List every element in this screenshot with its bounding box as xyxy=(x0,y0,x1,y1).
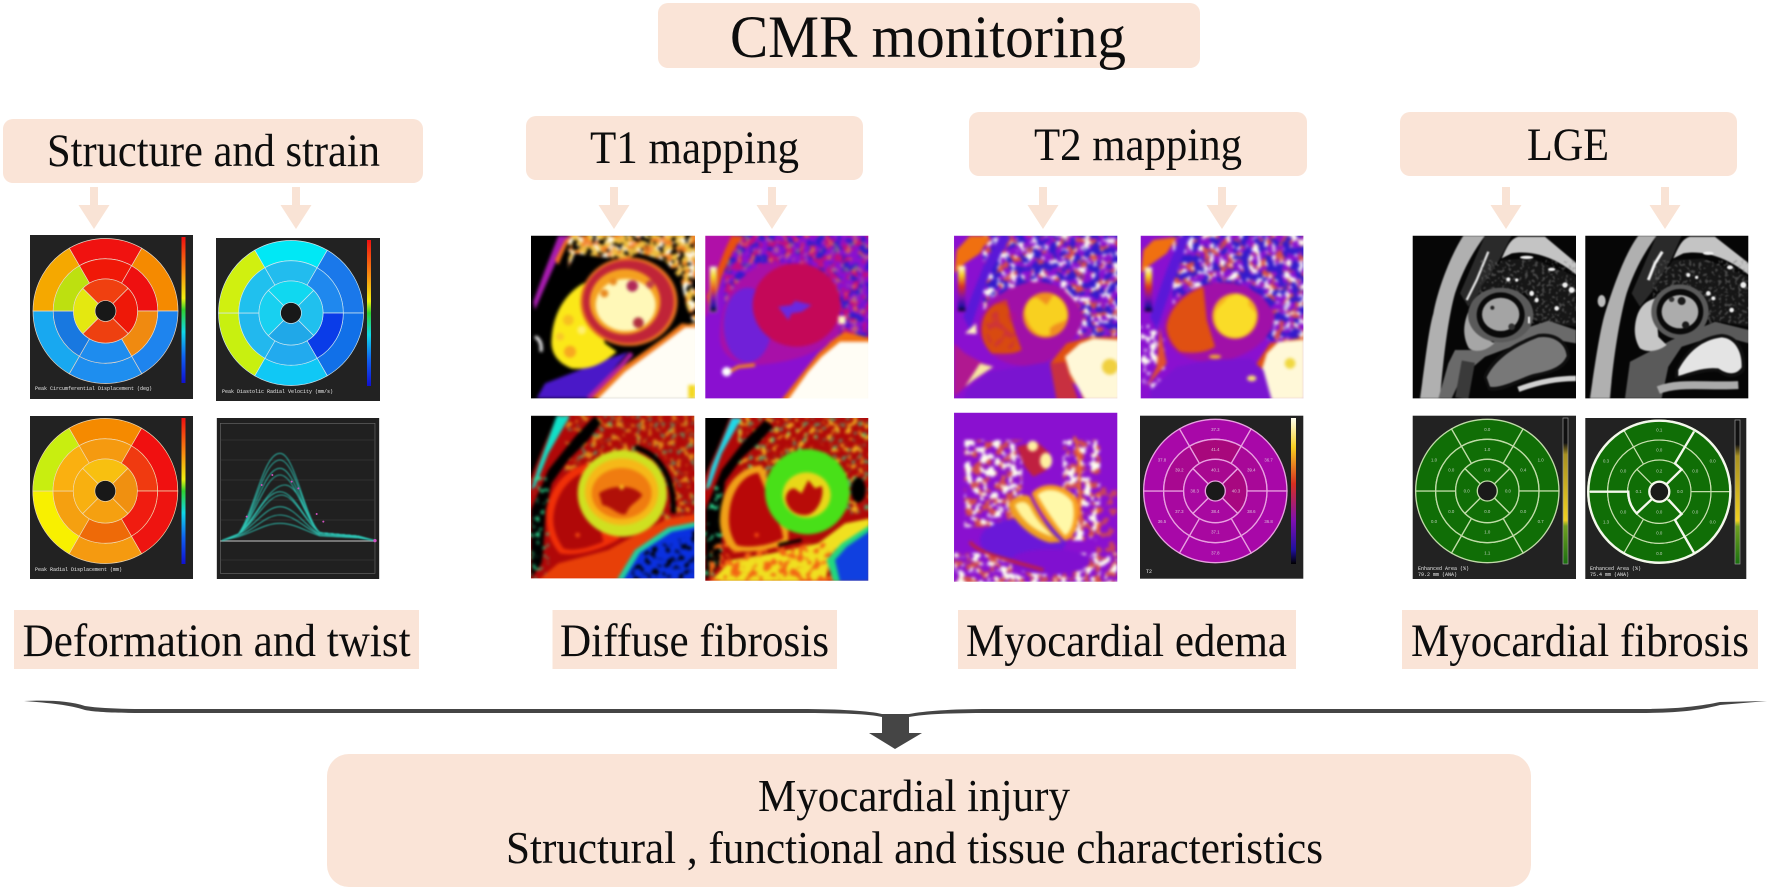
bullseye chart: LGE enhanced area: 0.4 xyxy=(1520,468,1527,473)
heading: T2 mapping xyxy=(969,112,1307,176)
image: LGE short-axis 2 xyxy=(1583,233,1753,403)
bullseye chart: LGE enhanced area with highlighted segments: 0.3 xyxy=(1603,458,1610,463)
bullseye chart: LGE enhanced area with highlighted segments: 0.0 xyxy=(1656,530,1663,535)
bullseye chart: LGE enhanced area: 0.0 xyxy=(1484,427,1491,432)
heading: T2 mapping: T2 mapping xyxy=(1034,119,1242,171)
bullseye chart: T2 values: 40.1 xyxy=(1211,468,1220,473)
image: T2 map 2 xyxy=(1138,233,1308,403)
label: Myocardial fibrosis: Myocardial fibrosis xyxy=(1411,615,1749,667)
conclusion box: Myocardial injury: Myocardial injury xyxy=(758,770,1070,821)
arrows from headings to images xyxy=(78,187,1680,229)
image: T1 colour map native xyxy=(528,413,698,583)
bullseye chart: LGE enhanced area with highlighted segments: 0.2 xyxy=(1656,468,1663,473)
bullseye chart: peak diastolic radial velocity xyxy=(216,238,380,401)
bullseye chart: LGE enhanced area: 79.2 mm (ANA) xyxy=(1418,572,1457,578)
bullseye chart: LGE enhanced area with highlighted segments: 0.0 xyxy=(1656,551,1663,556)
heading: Structure and strain: Structure and strain xyxy=(47,125,380,177)
image: T2 map 1 xyxy=(952,233,1122,403)
bullseye chart: LGE enhanced area: 0.0 xyxy=(1505,488,1512,493)
image: T1 colour map post-contrast xyxy=(702,413,872,583)
heading: T1 mapping: T1 mapping xyxy=(590,122,799,174)
bullseye chart: T2 values xyxy=(1140,416,1303,579)
bullseye chart: LGE enhanced area xyxy=(1413,416,1576,579)
bullseye chart: peak circumferential displacement xyxy=(30,235,193,399)
label: Diffuse fibrosis: Diffuse fibrosis xyxy=(560,615,829,667)
bullseye chart: LGE enhanced area with highlighted segments: 0.1 xyxy=(1656,428,1663,433)
bullseye chart: T2 values: 37.3 xyxy=(1175,509,1184,514)
bullseye chart: peak circumferential displacement: Peak Circumferential Displacement (deg) xyxy=(35,386,152,392)
bullseye chart: peak radial displacement xyxy=(30,416,193,579)
conclusion box: Myocardial injury: Structural , functional and tissue characteristics xyxy=(506,822,1323,873)
bullseye chart: T2 values: 37.3 xyxy=(1211,427,1220,432)
bullseye chart: LGE enhanced area with highlighted segments: 0.0 xyxy=(1656,448,1663,453)
image: LGE short-axis 1 xyxy=(1410,233,1580,403)
bullseye chart: LGE enhanced area: 0.0 xyxy=(1520,509,1527,514)
bullseye chart: LGE enhanced area with highlighted segments xyxy=(1585,418,1746,579)
label: Deformation and twist: Deformation and twist xyxy=(23,615,411,667)
bullseye chart: T2 values: 39.2 xyxy=(1175,468,1184,473)
label: Myocardial edema: Myocardial edema xyxy=(966,615,1287,667)
bullseye chart: LGE enhanced area with highlighted segments: Enhanced Area (%) xyxy=(1590,566,1641,572)
bullseye chart: LGE enhanced area with highlighted segments: 1.3 xyxy=(1603,520,1610,525)
bullseye chart: LGE enhanced area: 1.0 xyxy=(1484,530,1491,535)
image: T2 long-axis map xyxy=(952,410,1122,583)
bullseye chart: LGE enhanced area with highlighted segments: 0.0 xyxy=(1710,458,1716,463)
bullseye chart: T2 values: 41.4 xyxy=(1211,447,1220,452)
heading: LGE xyxy=(1400,112,1737,176)
bullseye chart: T2 values: 39.4 xyxy=(1247,468,1256,473)
image: T1 post-contrast map xyxy=(702,233,872,403)
bullseye chart: T2 values: 37.8 xyxy=(1158,458,1167,463)
heading: T1 mapping xyxy=(526,116,863,180)
bullseye chart: T2 values: 40.3 xyxy=(1232,488,1241,493)
bullseye chart: T2 values: 37.1 xyxy=(1211,530,1220,535)
bullseye chart: LGE enhanced area with highlighted segments: 0.0 xyxy=(1710,520,1716,525)
heading: LGE: LGE xyxy=(1527,119,1609,171)
bullseye chart: LGE enhanced area with highlighted segments: 0.0 xyxy=(1677,489,1684,494)
bullseye chart: LGE enhanced area: 0.0 xyxy=(1448,468,1455,473)
bullseye chart: T2 values: 38.3 xyxy=(1190,488,1199,493)
bullseye chart: LGE enhanced area: 1.1 xyxy=(1484,550,1491,555)
bullseye chart: LGE enhanced area with highlighted segments: 0.0 xyxy=(1620,510,1627,515)
bullseye chart: LGE enhanced area: 1.0 xyxy=(1431,458,1438,463)
bullseye chart: LGE enhanced area: 1.0 xyxy=(1538,458,1544,463)
bullseye chart: LGE enhanced area: 0.0 xyxy=(1484,509,1491,514)
image: T1 native map xyxy=(525,230,712,417)
bullseye chart: T2 values: 37.8 xyxy=(1211,550,1220,555)
bullseye chart: T2 values: 38.6 xyxy=(1247,509,1256,514)
bullseye chart: LGE enhanced area: 0.0 xyxy=(1431,519,1438,524)
bullseye chart: T2 values: 36.7 xyxy=(1264,458,1273,463)
bullseye chart: T2 values: T2 xyxy=(1146,569,1152,575)
bullseye chart: LGE enhanced area with highlighted segments: 0.0 xyxy=(1620,468,1627,473)
line chart: strain curves xyxy=(217,418,379,579)
bullseye chart: LGE enhanced area with highlighted segments: 75.4 mm (ANA) xyxy=(1590,572,1629,578)
title: CMR monitoring: CMR monitoring xyxy=(730,4,1126,70)
bullseye chart: LGE enhanced area with highlighted segments: 0.0 xyxy=(1692,510,1699,515)
bullseye chart: LGE enhanced area with highlighted segments: 0.0 xyxy=(1692,468,1699,473)
bullseye chart: LGE enhanced area: 1.0 xyxy=(1484,447,1491,452)
conclusion box: Myocardial injury xyxy=(327,754,1531,887)
bullseye chart: LGE enhanced area: 0.7 xyxy=(1538,519,1544,524)
bullseye chart: LGE enhanced area: 0.0 xyxy=(1448,509,1455,514)
bullseye chart: T2 values: 36.8 xyxy=(1264,519,1273,524)
bullseye chart: LGE enhanced area: 0.0 xyxy=(1464,488,1470,493)
bullseye chart: LGE enhanced area: 0.0 xyxy=(1484,468,1491,473)
bullseye chart: peak diastolic radial velocity: Peak Diastolic Radial Velocity (mm/s) xyxy=(222,389,333,395)
bullseye chart: T2 values: 38.4 xyxy=(1211,509,1220,514)
bullseye chart: LGE enhanced area: Enhanced Area (%) xyxy=(1418,566,1469,572)
brace line merging into down arrow xyxy=(24,701,1767,749)
bullseye chart: peak radial displacement: Peak Radial Displacement (mm) xyxy=(35,567,122,573)
bullseye chart: LGE enhanced area with highlighted segments: 0.1 xyxy=(1636,489,1642,494)
bullseye chart: LGE enhanced area with highlighted segments: 0.0 xyxy=(1656,510,1663,515)
bullseye chart: T2 values: 36.5 xyxy=(1158,519,1167,524)
